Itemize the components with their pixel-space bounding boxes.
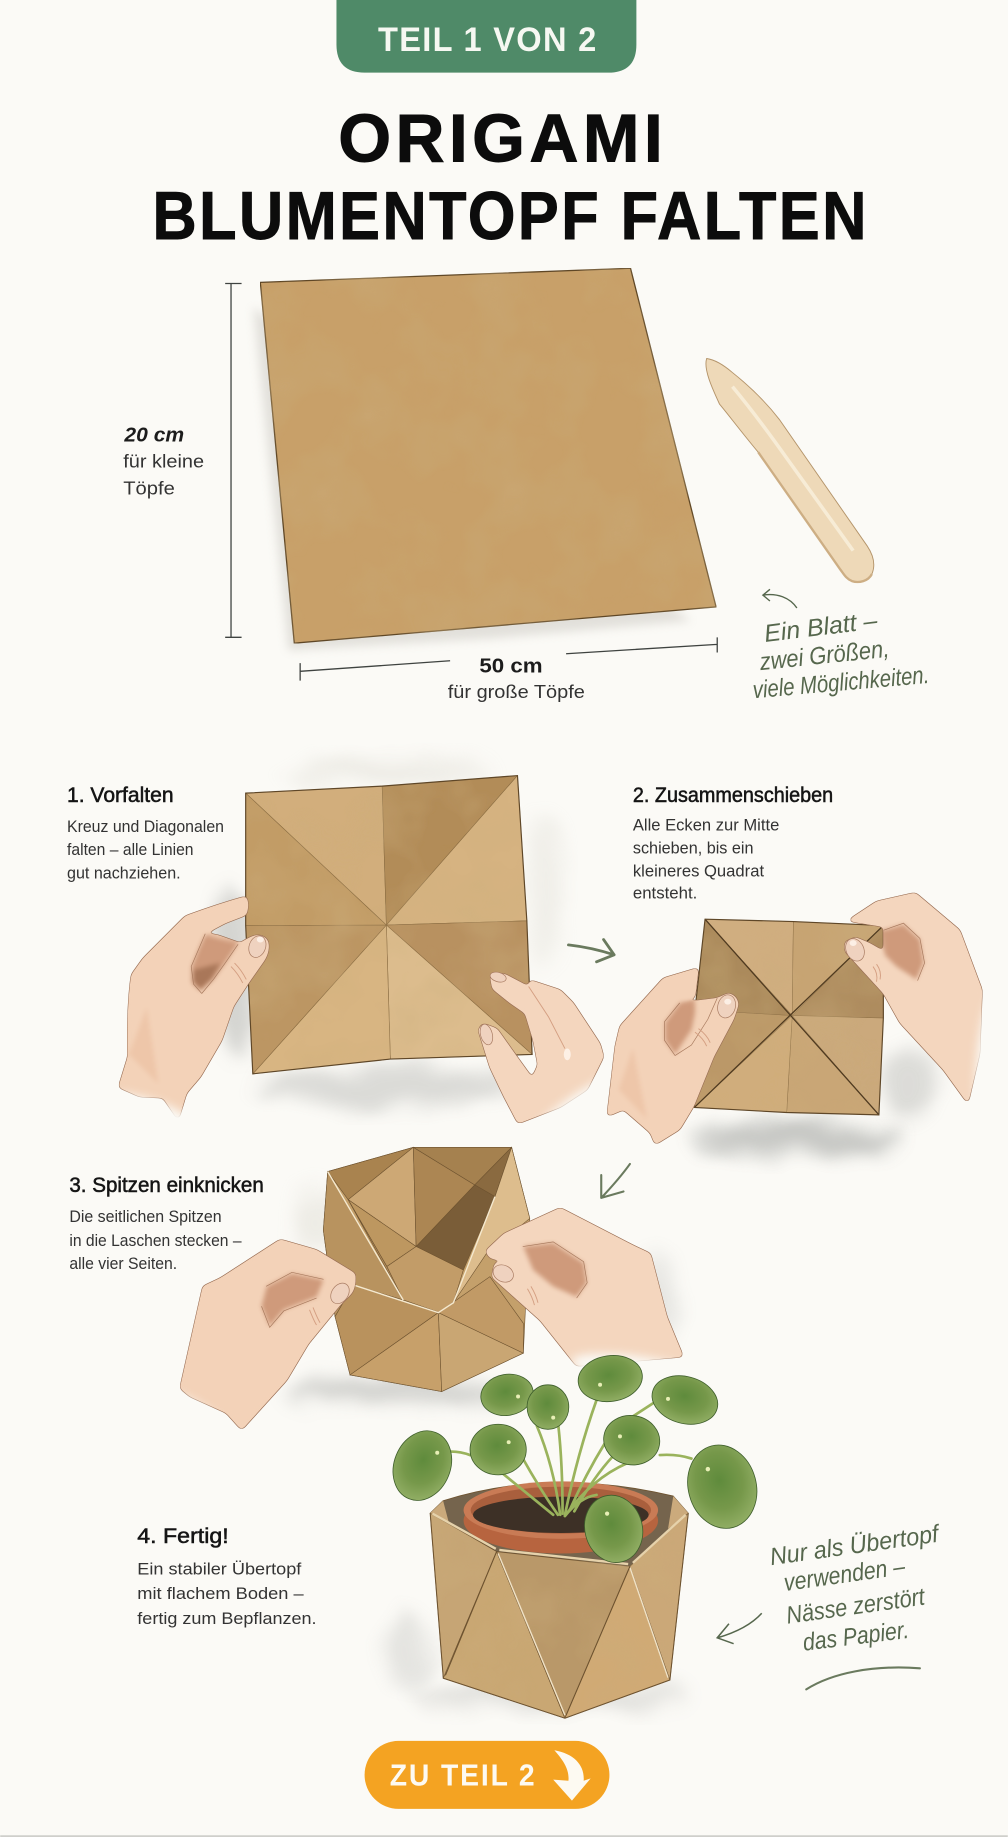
step 1 heading and text: 1. Vorfalten — [67, 784, 174, 807]
step 2 heading and text: schieben, bis ein — [633, 838, 754, 857]
illustration: step 2 sheet pushed together with hands — [587, 893, 1005, 1176]
icon: curved down arrow — [553, 1750, 591, 1801]
right hand — [478, 970, 627, 1154]
step 4 heading and text: mit flachem Boden – — [137, 1584, 304, 1603]
step 3 heading and text — [69, 1174, 264, 1273]
folded form — [323, 1147, 530, 1392]
left hand — [99, 896, 269, 1140]
folded sheet — [246, 776, 532, 1074]
handwritten note: one sheet, two sizes: zwei Größen, — [757, 636, 891, 676]
step 4 heading and text: Ein stabiler Übertopf — [137, 1560, 302, 1579]
handwritten note: one sheet, two sizes — [752, 589, 930, 704]
dimension: 20 cm height — [123, 284, 242, 637]
step 2 heading and text: 2. Zusammenschieben — [633, 784, 833, 807]
step 4 heading and text: 4. Fertig! — [137, 1525, 229, 1548]
step 2 heading and text: Alle Ecken zur Mitte — [633, 816, 779, 835]
title — [153, 101, 866, 254]
left hand — [160, 1240, 355, 1454]
step 1 heading and text: Kreuz und Diagonalen — [67, 817, 224, 836]
front leaf — [577, 1489, 650, 1569]
handwritten note: use only as outer pot: das Papier. — [801, 1617, 910, 1657]
title: ORIGAMI — [338, 101, 663, 177]
handwritten note: use only as outer pot: verwenden – — [782, 1553, 907, 1597]
illustration: step 3 tucking the tips with hands — [160, 1147, 708, 1454]
right hand — [842, 893, 1005, 1116]
title: BLUMENTOPF FALTEN — [153, 177, 866, 254]
folded square — [694, 919, 883, 1115]
right hand — [485, 1208, 708, 1394]
handwritten note: one sheet, two sizes: Ein Blatt – — [763, 607, 879, 648]
handwritten note: one sheet, two sizes: viele Möglichkeiten. — [752, 662, 930, 704]
handwritten note: use only as outer pot: Nässe zerstört — [785, 1583, 927, 1630]
step 3 heading and text: Die seitlichen Spitzen — [69, 1207, 222, 1226]
step 1 heading and text — [67, 784, 224, 883]
left hand — [587, 968, 738, 1176]
button: to part 2: ZU TEIL 2 — [390, 1759, 535, 1793]
stems — [451, 1400, 691, 1516]
arrow: step 1 to step 2 — [568, 940, 614, 962]
arrow: step 2 to step 3 — [601, 1164, 630, 1198]
illustration: blank kraft paper sheet — [253, 268, 716, 650]
step 1 heading and text: gut nachziehen. — [67, 864, 181, 883]
step 4 heading and text — [137, 1525, 317, 1628]
dimension: 50 cm width — [300, 637, 717, 702]
button: to part 2 — [365, 1741, 609, 1809]
step 4 heading and text: fertig zum Bepflanzen. — [137, 1609, 317, 1628]
step 2 heading and text — [633, 784, 833, 903]
step 2 heading and text: kleineres Quadrat — [633, 861, 764, 880]
illustration: step 1 pre-folded sheet with hands — [99, 757, 627, 1154]
header tab: Teil 1 von 2: TEIL 1 VON 2 — [378, 21, 596, 59]
step 2 heading and text: entsteht. — [633, 884, 697, 903]
dimension: 50 cm width: für große Töpfe — [448, 681, 585, 702]
step 3 heading and text: in die Laschen stecken – — [69, 1231, 242, 1250]
step 1 heading and text: falten – alle Linien — [67, 840, 194, 859]
illustration: wooden bone folder — [706, 358, 874, 582]
step 3 heading and text: alle vier Seiten. — [69, 1254, 177, 1273]
origami pot front — [430, 1513, 688, 1718]
handwritten note: use only as outer pot — [717, 1520, 942, 1689]
pilea leaves — [383, 1351, 766, 1536]
dimension: 20 cm height: 20 cm — [123, 425, 184, 447]
pot back and terracotta pot — [430, 1481, 688, 1566]
step 3 heading and text: 3. Spitzen einknicken — [69, 1174, 264, 1197]
dimension: 50 cm width: 50 cm — [479, 655, 543, 677]
dimension: 20 cm height: Töpfe — [123, 477, 175, 498]
illustration: finished origami pot with pilea plant — [383, 1351, 766, 1718]
dimension: 20 cm height: für kleine — [123, 450, 204, 471]
header tab: Teil 1 von 2 — [336, 0, 636, 73]
handwritten note: use only as outer pot: Nur als Übertopf — [768, 1520, 942, 1571]
